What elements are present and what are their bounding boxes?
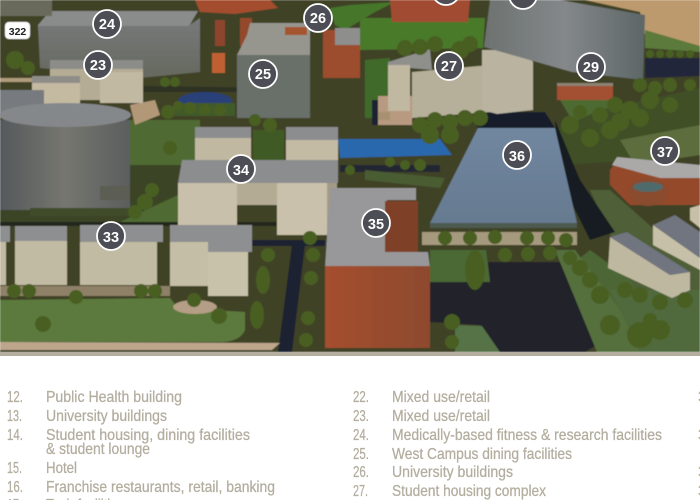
building 28 glass tower [484,0,645,80]
marker 36: 36 [509,149,525,165]
legend clipped third column [698,389,700,500]
marker 29: 29 [583,60,599,76]
marker 37 [651,137,679,165]
sand area [585,0,700,48]
legend left column: Public Health building [46,389,182,406]
legend right column: 27. [353,483,368,500]
legend left column: 14. [7,427,23,444]
cylinder tower [0,90,44,115]
marker 24: 24 [99,17,115,33]
marker 34 [227,155,255,183]
campus aerial map [0,0,700,356]
marker 35 [362,209,390,237]
legend right column: University buildings [392,464,513,481]
marker 25: 25 [255,67,271,83]
highway 322 label: 322 [9,26,26,38]
roads [0,78,110,82]
pond [178,92,232,110]
lawn [0,298,245,342]
legend right column: 22. [353,389,369,406]
legend left column [7,389,275,500]
legend right column: Mixed use/retail [392,389,490,406]
marker 33: 33 [103,230,119,246]
legend right column: Student housing complex [392,483,546,500]
legend left column: Hotel [46,460,77,477]
marker 37: 37 [657,145,673,161]
marker 25 [249,60,277,88]
marker 34: 34 [233,163,249,179]
building 27 [388,49,432,70]
marker 24 [93,10,121,38]
legend left column: Franchise restaurants, retail, banking [46,479,275,496]
building 25 [237,23,310,55]
marker 27: 27 [441,59,457,75]
building 34 [195,127,251,138]
legend left column: 15. [7,460,22,477]
marker 33 [97,222,125,250]
legend left column: 16. [7,479,23,496]
parking lot [430,262,597,352]
building 23 [50,60,143,100]
legend right column: 26. [353,464,369,481]
marker 36 [503,141,531,169]
marker 23: 23 [90,58,106,74]
legend left column: 13. [7,408,22,425]
building 24 [38,11,198,28]
building 26 [323,30,360,78]
marker 23 [84,51,112,79]
marker clipped top right [509,0,537,9]
legend left column: Student housing, dining facilities [46,427,250,444]
right residential blocks [608,237,690,298]
building 37 [610,157,700,205]
legend right column: Mixed use/retail [392,408,490,425]
legend left column: University buildings [46,408,167,425]
marker clipped top left [432,0,460,5]
legend right column: 25. [353,446,369,463]
legend right column: 24. [353,427,369,444]
marker 27 [435,52,463,80]
building 35 [325,188,430,268]
legend left column: & student lounge [46,441,150,458]
water [338,139,452,158]
building 29 [557,83,613,87]
footprint band [0,352,700,356]
legend right column: 23. [353,408,369,425]
legend right column: Medically-based fitness & research facilities [392,427,662,444]
marker 26 [304,4,332,32]
legend right column: West Campus dining facilities [392,446,572,463]
legend left column: 12. [7,389,23,406]
marker 29 [577,53,605,81]
building 36 [430,128,577,223]
lawns [360,18,485,50]
marker 26: 26 [310,11,326,27]
legend right column [353,389,662,500]
building row 33 [15,226,67,242]
highway shield [5,22,30,39]
ground [0,0,700,352]
trees [6,36,696,349]
top red buildings [195,0,278,14]
marker 35: 35 [368,217,384,233]
